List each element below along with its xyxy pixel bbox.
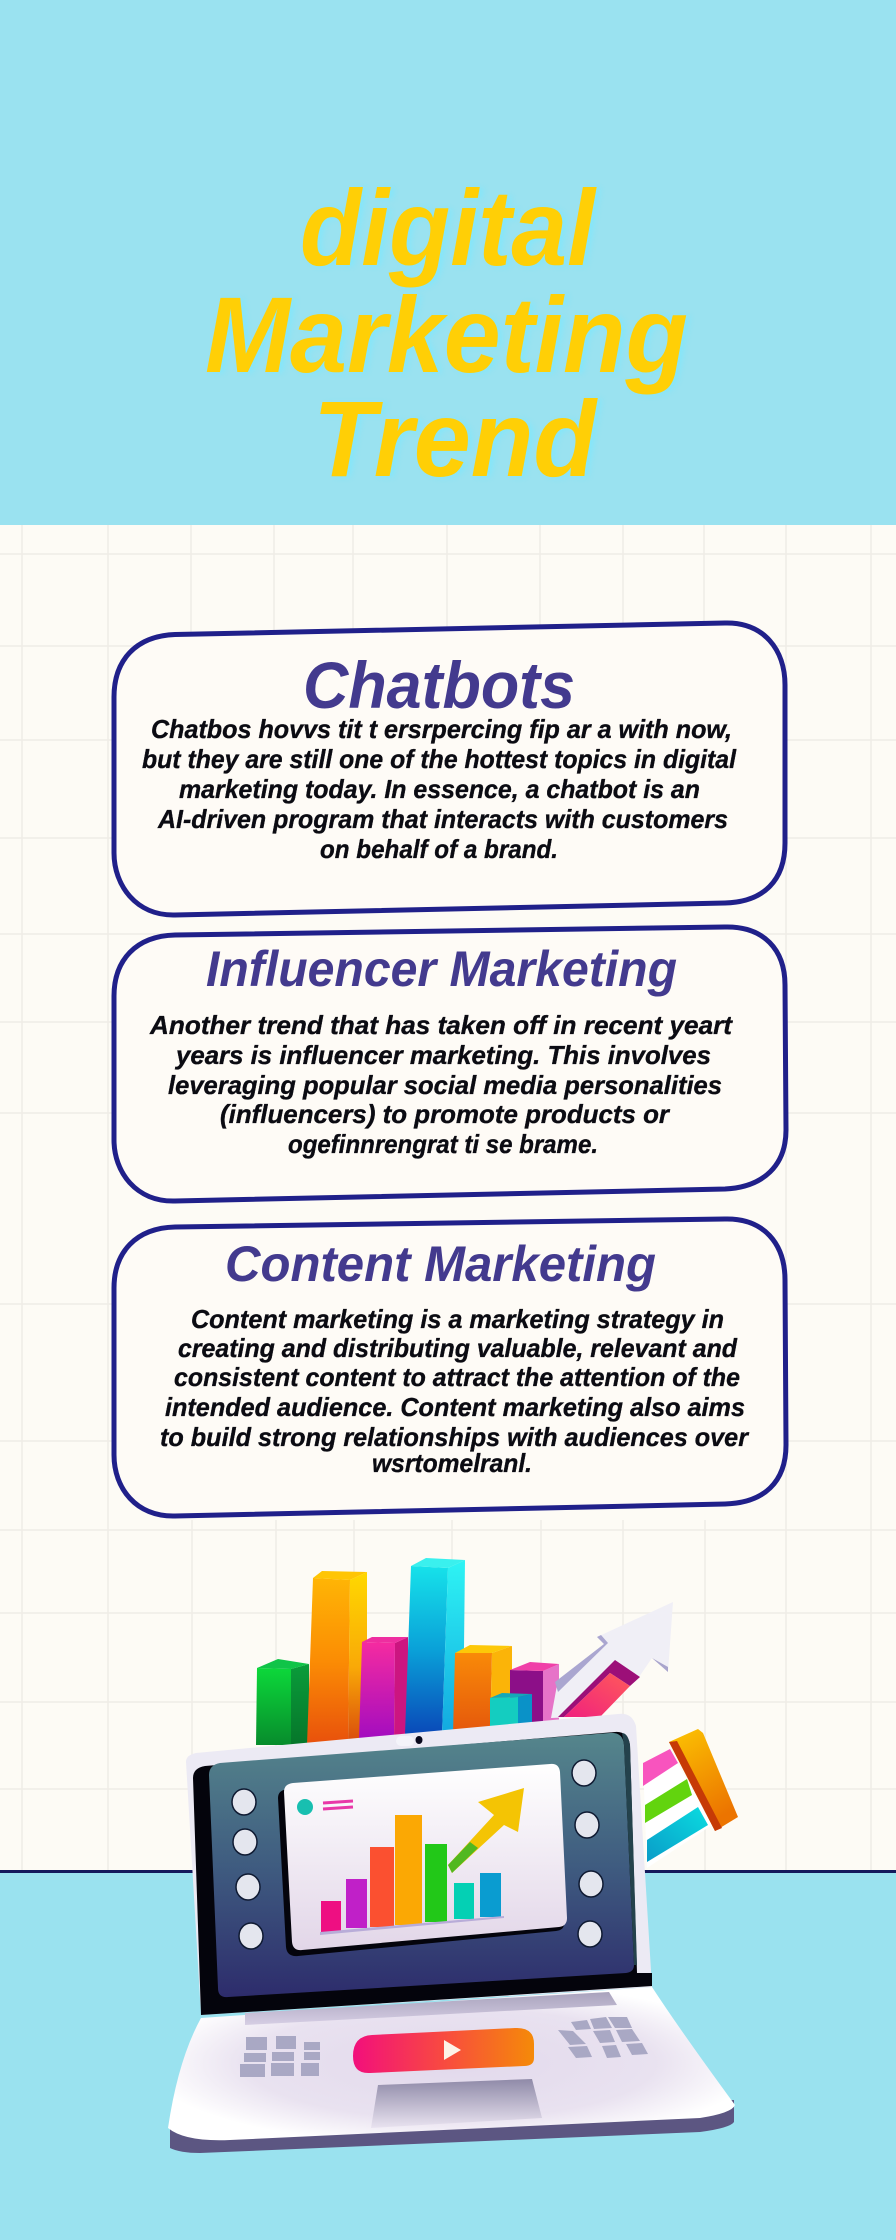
text: content body: Content marketing is a marketing strategy in bbox=[191, 1304, 724, 1334]
text: chatbots body: marketing today. In essence, a chatbot is an bbox=[179, 774, 700, 804]
text: influencer body: ogefinnrengrat ti se brame. bbox=[288, 1129, 598, 1159]
text: influencer body: years is influencer marketing. This involves bbox=[174, 1040, 711, 1070]
laptop base bbox=[168, 1987, 735, 2153]
text: content body: creating and distributing valuable, relevant and bbox=[178, 1333, 738, 1363]
chart bars bbox=[320, 1815, 504, 1935]
footer background bbox=[0, 1873, 896, 2240]
text: influencer body: Another trend that has taken off in recent yeart bbox=[149, 1010, 733, 1040]
title: digital bbox=[300, 167, 597, 288]
text: content body bbox=[160, 1304, 750, 1478]
icon: white growth arrow bbox=[551, 1602, 673, 1718]
legend dot bbox=[297, 1799, 313, 1815]
text: influencer body: leveraging popular social media personalities bbox=[168, 1070, 722, 1100]
text: chatbots body: AI-driven program that interacts with customers bbox=[157, 804, 728, 834]
legend lines bbox=[323, 1801, 353, 1809]
icon: play bbox=[444, 2040, 461, 2060]
keys: right bbox=[558, 2017, 648, 2058]
body background bbox=[0, 525, 896, 1871]
hinge strip bbox=[245, 1992, 617, 2025]
panel: influencer marketing bbox=[114, 927, 786, 1201]
title: Trend bbox=[313, 378, 598, 499]
text: content body: wsrtomelranl. bbox=[372, 1448, 532, 1478]
text: chatbots body: on behalf of a brand. bbox=[320, 834, 558, 864]
heading: chatbots: Chatbots bbox=[303, 648, 575, 722]
text: influencer body: (influencers) to promote products or bbox=[220, 1099, 671, 1129]
trackpad bbox=[371, 2079, 542, 2128]
text: chatbots body: but they are still one of the hottest topics in digital bbox=[142, 744, 737, 774]
header background bbox=[0, 0, 896, 525]
title bbox=[205, 167, 688, 499]
bar: cyan bbox=[405, 1558, 465, 1735]
text: influencer body bbox=[149, 1010, 733, 1159]
text: content body: to build strong relationships with audiences over bbox=[160, 1422, 750, 1452]
text: chatbots body: Chatbos hovvs tit t ersrpercing fip ar a with now, bbox=[151, 714, 732, 744]
bar: magenta bbox=[359, 1637, 408, 1740]
heading: content marketing: Content Marketing bbox=[225, 1236, 656, 1292]
button: play bar bbox=[353, 2028, 534, 2073]
bar: teal bbox=[490, 1693, 532, 1730]
illustration: 3d bar chart bbox=[256, 1558, 559, 1745]
laptop lid bbox=[186, 1714, 652, 2015]
icon: side bars bbox=[643, 1729, 738, 1868]
screen buttons bbox=[232, 1760, 603, 1949]
title: Marketing bbox=[205, 274, 688, 395]
laptop screen bbox=[209, 1733, 634, 1997]
webcam bbox=[396, 1736, 422, 1746]
bar: tall orange bbox=[307, 1571, 367, 1745]
keys: left bbox=[240, 2036, 320, 2077]
illustration: laptop bbox=[168, 1714, 735, 2153]
panel: chatbots bbox=[114, 623, 785, 915]
heading: influencer marketing: Influencer Marketing bbox=[206, 941, 677, 997]
text: content body: intended audience. Content marketing also aims bbox=[165, 1392, 745, 1422]
bar: green bbox=[256, 1659, 309, 1745]
text: content body: consistent content to attract the attention of the bbox=[174, 1362, 740, 1392]
chart card bbox=[278, 1764, 567, 1956]
bar: orange bbox=[453, 1645, 512, 1735]
text: chatbots body bbox=[142, 714, 737, 864]
panel: content marketing bbox=[114, 1219, 786, 1516]
bar: purple bbox=[510, 1662, 559, 1730]
icon: yellow arrow bbox=[448, 1788, 524, 1873]
